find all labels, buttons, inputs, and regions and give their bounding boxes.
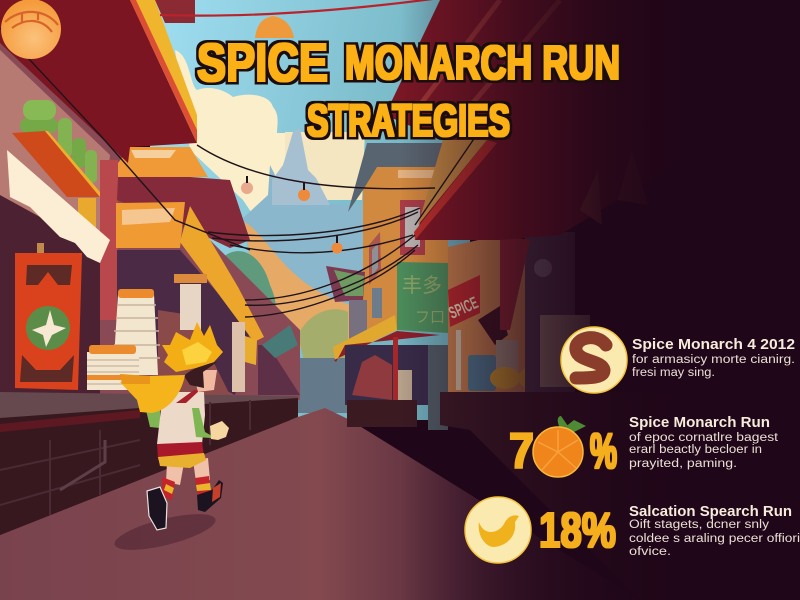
title [197, 33, 620, 146]
stat 1: spice monarch: fresi may sing. [632, 367, 715, 379]
stat 2: 70 percent: prayited, paming. [629, 458, 737, 470]
green hanging shop sign: フ口 [415, 309, 445, 326]
stat 2: 70 percent: Spice Monarch Run [629, 415, 770, 431]
stat 3: 18 percent [465, 497, 800, 563]
far orange building on the right [326, 143, 448, 340]
stat 3: 18 percent: Salcation Spearch Run [629, 504, 792, 520]
stat 2: 70 percent [509, 415, 779, 479]
stat 1: spice monarch [561, 327, 795, 393]
runner character [111, 322, 229, 557]
stat 1: spice monarch: Spice Monarch 4 2012 [632, 337, 795, 353]
shop sign with green emblem [15, 243, 82, 390]
stat 2: 70 percent: 7 [509, 423, 534, 479]
roof: left red canopy [0, 0, 197, 163]
right shop wall with spice sign [440, 232, 800, 600]
green hanging shop sign [397, 262, 448, 333]
green hanging shop sign: 丰多 [402, 274, 442, 297]
title: SPICE [197, 33, 328, 93]
string wires and hanging lamps [0, 0, 480, 317]
stat 1: spice monarch: for armasicy morte cianirg. [632, 354, 795, 366]
icon: orange with leaves [533, 416, 586, 477]
cream scalloped awning [7, 150, 110, 263]
stacks of plates on the left [87, 289, 160, 390]
right shop wall with spice sign: SPICE [446, 293, 481, 323]
title: MONARCH RUN [345, 37, 620, 90]
stat 2: 70 percent: of epoc cornatlre bagest [629, 432, 779, 444]
street floor [0, 408, 640, 600]
stat 2: 70 percent: % [590, 423, 617, 479]
stat 3: 18 percent: coldee s araling pecer offiori [629, 533, 800, 545]
far left wall of the market [0, 40, 300, 400]
icon: yellow bird [465, 497, 531, 563]
right yellow balcony and stall [333, 315, 448, 430]
stat 3: 18 percent: Oift stagets, dcner snly [629, 519, 769, 531]
icon: brown spice coil [561, 327, 627, 393]
title: STRATEGIES [307, 95, 510, 146]
stat 3: 18 percent: ofvice. [629, 546, 671, 558]
right red canopy [385, 0, 800, 240]
lanterns [1, 0, 294, 59]
stat 2: 70 percent: erarl beactly becloer in [629, 444, 762, 456]
background: sky and distant landscape [150, 0, 470, 420]
left stall counter [0, 392, 298, 535]
stat 3: 18 percent: 18% [539, 504, 616, 558]
left building balcony and awning [78, 147, 300, 395]
shelf with green bowls [12, 100, 100, 197]
